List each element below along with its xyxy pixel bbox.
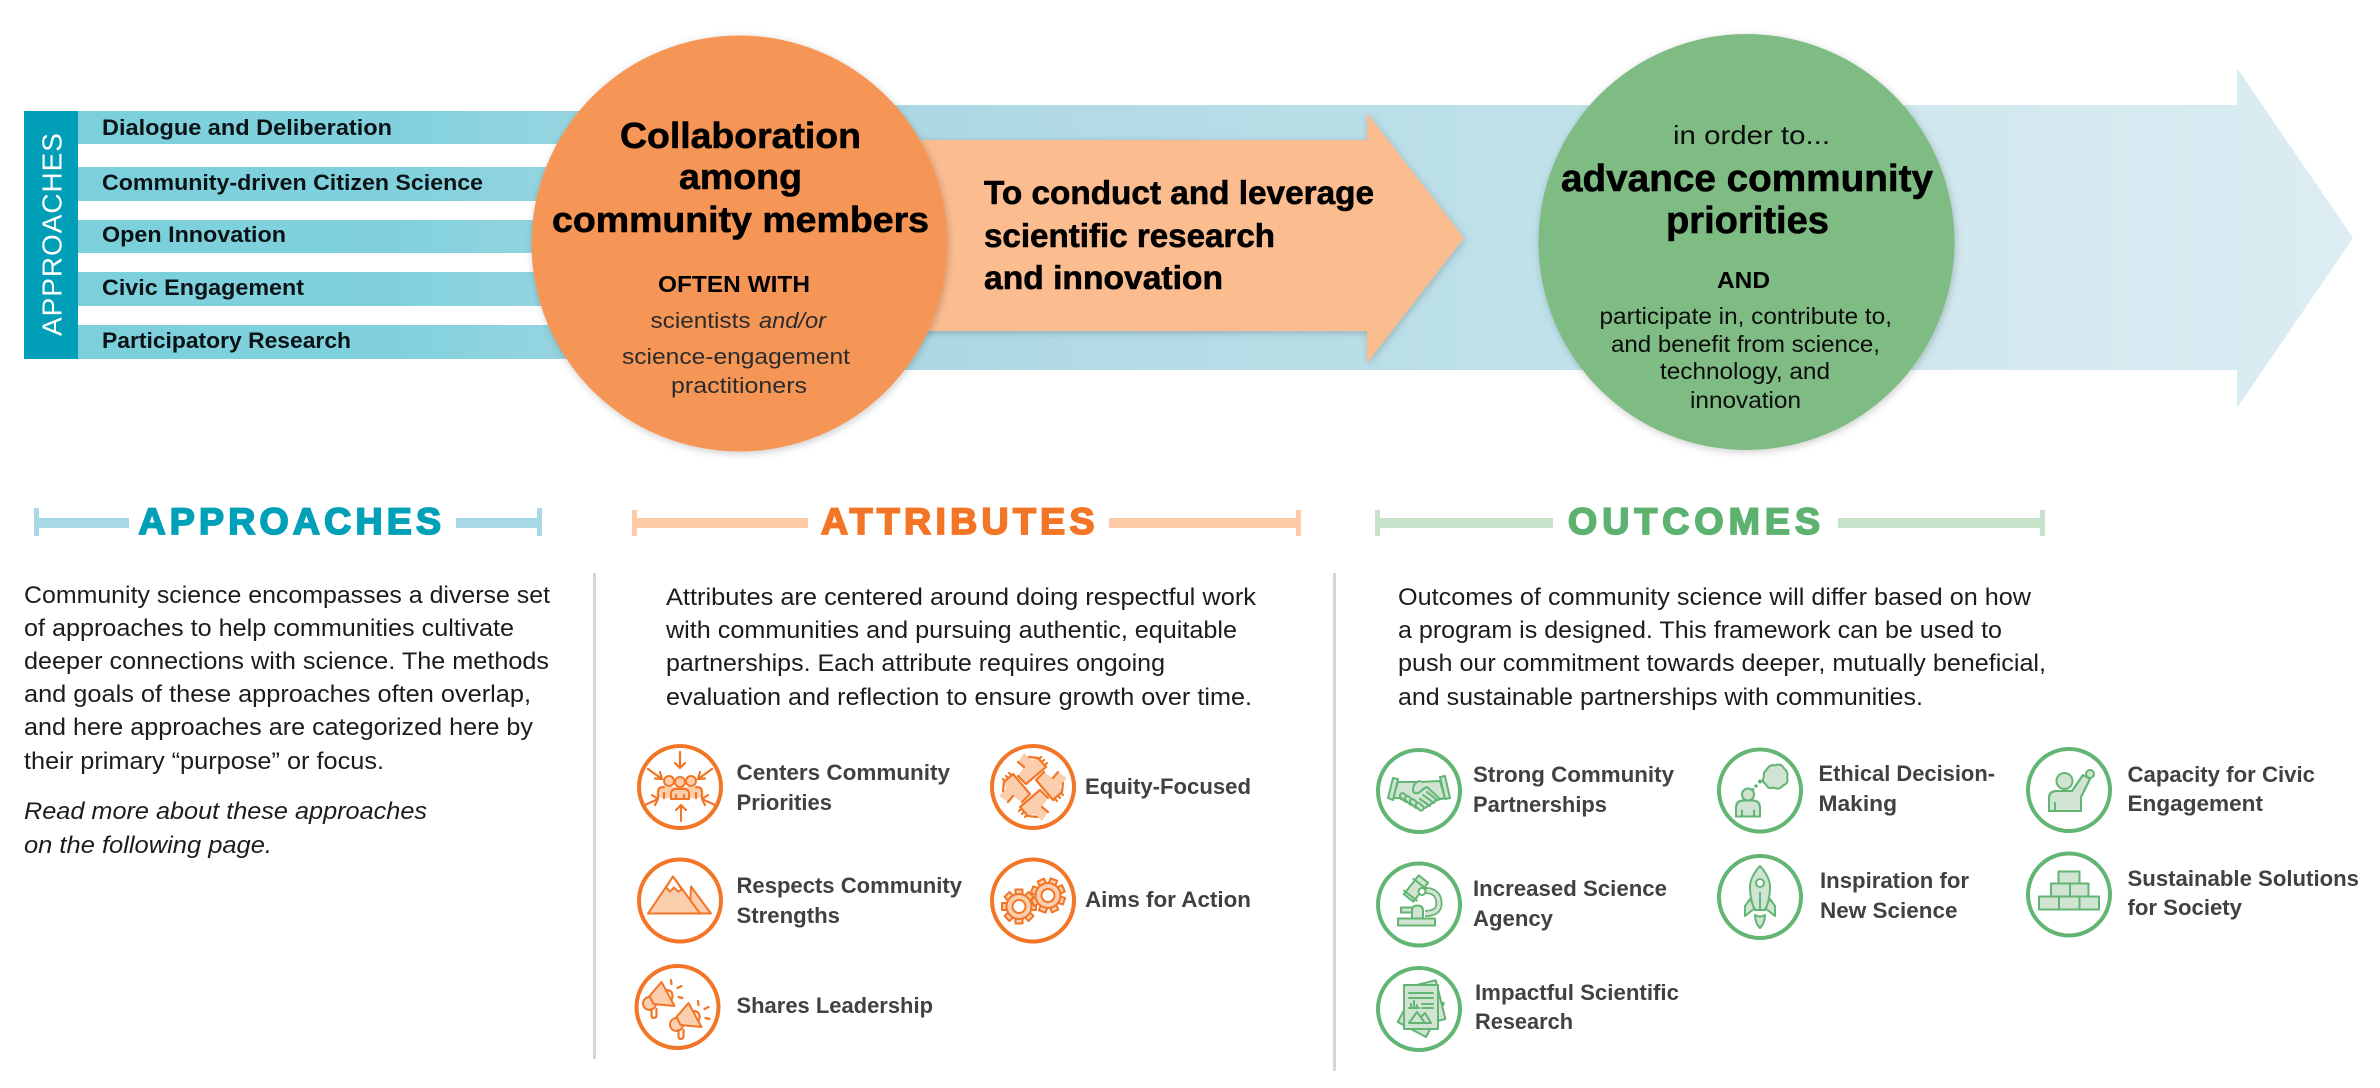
- approach bar: Open Innovation: [78, 220, 618, 253]
- outcome: strong community partnerships: Strong Community: [1473, 762, 1675, 787]
- outcomes description: Outcomes of community science will differ based on how: [1398, 584, 2032, 611]
- outcomes description: and sustainable partnerships with communities.: [1398, 684, 1923, 711]
- orange circle: collaboration: community members: [552, 199, 929, 240]
- attribute: respects community strengths: [639, 860, 963, 942]
- outcome: sustainable solutions for society: for Society: [2128, 895, 2243, 920]
- vertical approaches label: APPROACHES: [36, 133, 68, 336]
- outcome: inspiration for new science: Inspiration for: [1820, 868, 1969, 893]
- green circle: priorities: advance community: [1561, 158, 1933, 200]
- orange circle: collaboration: practitioners: [671, 373, 807, 398]
- orange circle: collaboration: science-engagement: [622, 344, 851, 369]
- orange circle: collaboration: scientists: [650, 308, 750, 333]
- attribute: centers community priorities: Centers Community: [736, 760, 951, 785]
- approach bar: Community-driven Citizen Science: Community-driven Citizen Science: [102, 170, 483, 195]
- outcome: ethical decision-making: Making: [1818, 791, 1897, 816]
- outcomes description: push our commitment towards deeper, mutually beneficial,: [1398, 650, 2046, 677]
- outcome: ethical decision-making: Ethical Decision-: [1818, 761, 1995, 786]
- approaches stack: [24, 111, 618, 359]
- outcome: sustainable solutions for society: [2028, 854, 2359, 936]
- approach bar: Dialogue and Deliberation: Dialogue and Deliberation: [102, 115, 392, 140]
- green circle: priorities: priorities: [1666, 200, 1829, 242]
- approach bar: Civic Engagement: Civic Engagement: [102, 275, 305, 300]
- green circle: priorities: innovation: [1690, 387, 1801, 413]
- attribute: centers community priorities: [639, 746, 951, 828]
- outcomes description: a program is designed. This framework can be used to: [1398, 617, 2002, 644]
- attribute: respects community strengths: Strengths: [736, 903, 840, 928]
- orange arrow: and innovation: [984, 259, 1223, 296]
- approaches description: Community science encompasses a diverse set: [24, 582, 550, 609]
- outcome: capacity for civic engagement: [2028, 749, 2315, 831]
- green circle: priorities: in order to...: [1673, 120, 1830, 150]
- green circle: priorities: participate in, contribute to,: [1600, 303, 1892, 329]
- approaches description: their primary “purpose” or focus.: [24, 748, 384, 775]
- read more note: on the following page.: [24, 832, 272, 859]
- attribute: equity-focused: [992, 746, 1251, 828]
- outcome: impactful scientific research: Research: [1475, 1009, 1573, 1034]
- outcome: increased science agency: Agency: [1473, 906, 1554, 931]
- attribute: equity-focused: Equity-Focused: [1085, 774, 1251, 799]
- green circle: priorities: AND: [1717, 267, 1770, 293]
- outcome: inspiration for new science: [1719, 856, 1969, 938]
- panel: attributes: [632, 500, 1301, 1048]
- approach bar: Dialogue and Deliberation: [78, 111, 618, 144]
- heading: outcomes: [1375, 500, 2045, 542]
- attribute: aims for action: [992, 860, 1251, 942]
- approach bar: Community-driven Citizen Science: [78, 167, 618, 201]
- outcome: capacity for civic engagement: Engagement: [2128, 791, 2264, 816]
- orange circle: collaboration: Collaboration: [620, 115, 861, 156]
- outcome: impactful scientific research: [1378, 968, 1679, 1050]
- orange circle: collaboration: among: [679, 156, 802, 197]
- orange circle: collaboration: OFTEN WITH: [658, 271, 810, 297]
- attribute: shares leadership: Shares Leadership: [736, 993, 933, 1018]
- orange circle: collaboration: and/or: [759, 308, 828, 333]
- outcomes description: [1398, 584, 2046, 711]
- outcome: increased science agency: [1378, 864, 1667, 946]
- approach bar: Civic Engagement: [78, 272, 618, 306]
- attributes description: Attributes are centered around doing respectful work: [666, 584, 1257, 611]
- outcome: sustainable solutions for society: Sustainable Solutions: [2128, 866, 2359, 891]
- attribute: aims for action: Aims for Action: [1085, 887, 1251, 912]
- heading: approaches: [34, 500, 542, 542]
- approach bar: Open Innovation: Open Innovation: [102, 222, 286, 247]
- outcome: capacity for civic engagement: Capacity for Civic: [2128, 762, 2315, 787]
- vertical approaches label: [24, 111, 78, 359]
- approach bar: Participatory Research: [78, 325, 618, 359]
- approaches description: and goals of these approaches often overlap,: [24, 681, 531, 708]
- heading: attributes: ATTRIBUTES: [821, 500, 1094, 542]
- outcome: strong community partnerships: [1378, 750, 1675, 832]
- outcome: ethical decision-making: [1719, 750, 1995, 832]
- attributes description: [665, 584, 1257, 711]
- green circle: priorities: [1538, 34, 1954, 450]
- outcome: strong community partnerships: Partnerships: [1473, 792, 1607, 817]
- outcome: impactful scientific research: Impactful Scientific: [1475, 980, 1679, 1005]
- outcome: increased science agency: Increased Science: [1473, 876, 1667, 901]
- attributes description: with communities and pursuing authentic, equitable: [665, 617, 1237, 644]
- read more note: Read more about these approaches: [24, 798, 427, 825]
- orange circle: collaboration: [532, 36, 948, 452]
- read more note: [24, 798, 427, 859]
- approaches description: of approaches to help communities cultivate: [24, 615, 514, 642]
- heading: outcomes: OUTCOMES: [1568, 500, 1820, 542]
- outcome: inspiration for new science: New Science: [1820, 898, 1958, 923]
- orange arrow: [900, 113, 1464, 363]
- attribute: shares leadership: [636, 966, 933, 1048]
- green circle: priorities: technology, and: [1660, 358, 1830, 384]
- approaches description: deeper connections with science. The methods: [24, 648, 549, 675]
- attributes description: evaluation and reflection to ensure growth over time.: [666, 684, 1252, 711]
- attribute: centers community priorities: Priorities: [736, 790, 832, 815]
- attributes description: partnerships. Each attribute requires ongoing: [666, 650, 1165, 677]
- approaches description: and here approaches are categorized here by: [24, 714, 533, 741]
- panel: outcomes: [1375, 500, 2359, 1050]
- heading: attributes: [632, 500, 1301, 542]
- orange arrow: To conduct and leverage: [984, 174, 1374, 211]
- main light-blue arrow: [880, 68, 2353, 408]
- panel: approaches: [24, 500, 550, 859]
- approaches description: [24, 582, 550, 775]
- approach bar: Participatory Research: Participatory Research: [102, 328, 351, 353]
- orange arrow: scientific research: [984, 217, 1275, 254]
- green circle: priorities: and benefit from science,: [1611, 331, 1880, 357]
- heading: approaches: APPROACHES: [138, 500, 441, 542]
- attribute: respects community strengths: Respects Community: [736, 873, 963, 898]
